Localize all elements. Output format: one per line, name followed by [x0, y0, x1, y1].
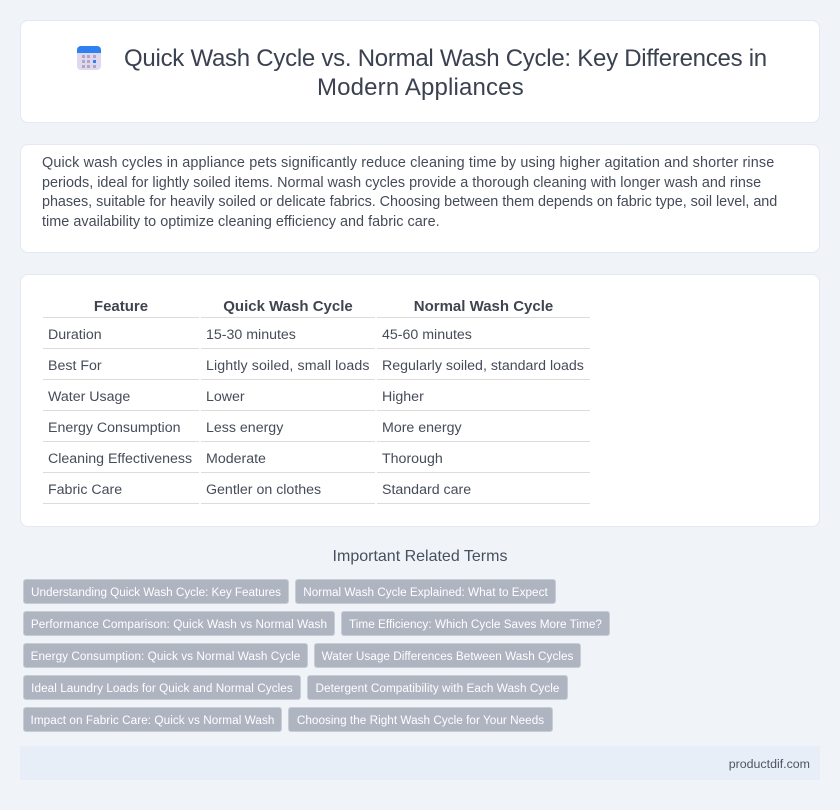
- row: fabric care: Standard care: [382, 482, 471, 498]
- row: water usage: [48, 389, 424, 405]
- tags: related terms: [23, 579, 610, 732]
- tag: Normal Wash Cycle Explained: What to Expect: [303, 586, 548, 599]
- header: normal: Normal Wash Cycle: [414, 298, 553, 315]
- tag: Choosing the Right Wash Cycle for Your Needs: [297, 714, 544, 727]
- row: energy: Energy Consumption: [48, 420, 180, 436]
- tag: Performance Comparison: Quick Wash vs Normal Wash: [31, 618, 327, 631]
- tag: Understanding Quick Wash Cycle: Key Features: [31, 586, 281, 599]
- intro text: [42, 155, 777, 230]
- intro text: periods, ideal for lightly soiled items. Normal wash cycles provide a thorough cleaning with longer wash and rinse: [42, 175, 761, 191]
- row: energy: [48, 420, 462, 436]
- heading: related terms: Important Related Terms: [333, 548, 507, 565]
- tag: Impact on Fabric Care: Quick vs Normal Wash: [31, 714, 274, 727]
- row: fabric care: Fabric Care: [48, 482, 122, 498]
- row: best for: Best For: [48, 358, 102, 374]
- tag: [288, 707, 553, 732]
- tag: Water Usage Differences Between Wash Cycles: [322, 650, 573, 663]
- tag: [307, 675, 568, 700]
- row: duration: 45-60 minutes: [382, 327, 472, 343]
- tag: [23, 611, 335, 636]
- row: duration: 15-30 minutes: [206, 327, 296, 343]
- icon: calendar: [77, 46, 101, 70]
- title: [124, 45, 767, 101]
- tag: [314, 643, 581, 668]
- tag: [23, 579, 289, 604]
- row: cleaning: [48, 451, 443, 467]
- row: energy: Less energy: [206, 420, 283, 436]
- panel: header: [20, 20, 820, 123]
- row: cleaning: Cleaning Effectiveness: [48, 451, 192, 467]
- tag: [341, 611, 610, 636]
- row: water usage: Water Usage: [48, 389, 130, 405]
- tag: [23, 643, 308, 668]
- tag: Ideal Laundry Loads for Quick and Normal Cycles: [31, 682, 293, 695]
- row: water usage: Lower: [206, 389, 245, 405]
- row: duration: [48, 327, 472, 343]
- row: best for: [48, 358, 584, 374]
- row: fabric care: Gentler on clothes: [206, 482, 321, 498]
- title: Modern Appliances: [317, 74, 524, 101]
- tag: [23, 707, 282, 732]
- tag: Detergent Compatibility with Each Wash Cycle: [315, 682, 560, 695]
- comparison table: [43, 298, 590, 504]
- row: fabric care: [48, 482, 471, 498]
- header: quick: Quick Wash Cycle: [223, 298, 353, 315]
- tag: Energy Consumption: Quick vs Normal Wash Cycle: [31, 650, 300, 663]
- intro text: Quick wash cycles in appliance pets significantly reduce cleaning time by using higher agitation and shorter rinse: [42, 155, 774, 171]
- footer: source: productdif.com: [729, 757, 810, 771]
- row: energy: More energy: [382, 420, 462, 436]
- panel: intro: [20, 144, 820, 253]
- intro text: phases, suitable for heavily soiled or delicate fabrics. Choosing between them depends on fabric type, soil level, and: [42, 194, 777, 210]
- row: cleaning: Thorough: [382, 451, 443, 467]
- footer bar: [20, 746, 820, 780]
- panel: comparison table: [20, 274, 820, 527]
- tag: [295, 579, 556, 604]
- row: water usage: Higher: [382, 389, 424, 405]
- row: best for: Lightly soiled, small loads: [206, 358, 370, 374]
- row: duration: Duration: [48, 327, 102, 343]
- tag: [23, 675, 301, 700]
- title: Quick Wash Cycle vs. Normal Wash Cycle: Key Differences in: [124, 45, 767, 72]
- header: feature: Feature: [94, 298, 148, 315]
- row: best for: Regularly soiled, standard loads: [382, 358, 584, 374]
- intro text: time availability to optimize cleaning efficiency and fabric care.: [42, 214, 440, 230]
- tag: Time Efficiency: Which Cycle Saves More Time?: [349, 618, 602, 631]
- row: cleaning: Moderate: [206, 451, 266, 467]
